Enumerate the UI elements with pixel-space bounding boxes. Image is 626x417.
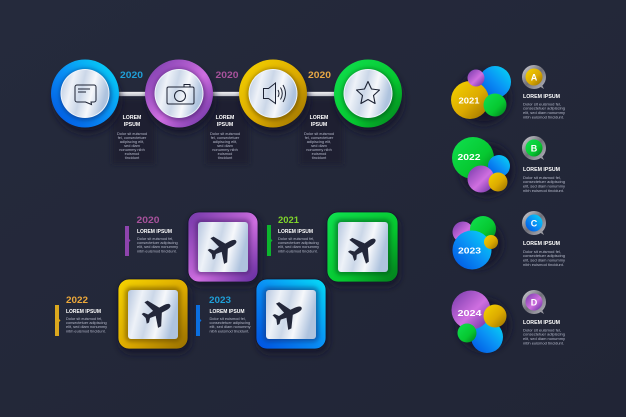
tile text 2022: 2022 — [66, 295, 88, 306]
tile text 2021: LOREM IPSUM — [278, 229, 313, 235]
bubble cluster 2022 — [452, 137, 513, 196]
bubble cluster 2022: 2022 — [458, 152, 481, 162]
square tile purple with plane — [188, 212, 260, 286]
badge A and text: elit, sed diam nonummy — [523, 110, 565, 115]
tile text 2022: elit, sed diam nonummy — [66, 324, 107, 329]
badge D and text: consectetuer adipiscing — [523, 332, 565, 336]
badge C and text: consectetuer adipiscing — [523, 253, 565, 258]
badge B and text — [522, 136, 565, 193]
tile text 2020: Dolor sit euismod fel, — [137, 236, 173, 241]
tile text 2022: nibh euismod tincidunt. — [66, 328, 106, 334]
label 2020 yellow: nonummy nibh — [306, 147, 332, 152]
label 2020 blue: euismod — [125, 151, 139, 156]
label 2020 purple: nonummy nibh — [212, 147, 238, 152]
timeline step 4: green circle, star — [334, 60, 403, 133]
square tile green with plane — [327, 212, 399, 286]
label 2020 yellow: LOREM — [310, 115, 328, 121]
badge D and text — [522, 290, 565, 346]
tile text 2023 — [196, 295, 251, 336]
label 2020 purple: sed diam — [217, 143, 233, 148]
badge C and text: Dolor sit euismod fel, — [523, 249, 561, 254]
label 2020 blue: nonummy nibh — [119, 147, 145, 152]
tile text 2020 — [125, 215, 178, 256]
badge B and text: Dolor sit euismod fel, — [523, 175, 561, 180]
badge B and text: LOREM IPSUM — [523, 167, 560, 173]
badge B and text: consectetuer adipiscing — [523, 179, 565, 184]
bubble cluster 2021 — [451, 66, 511, 124]
tile text 2020: 2020 — [136, 215, 160, 226]
label 2020 blue: fel, consectetuer — [118, 135, 147, 140]
label 2020 blue: 2020 — [120, 70, 143, 81]
label 2020 blue: adipiscing elit, — [120, 139, 144, 144]
badge D and text: elit, sed diam nonummy — [523, 336, 565, 341]
badge C and text — [522, 211, 565, 267]
badge A and text: consectetuer adipiscing — [523, 106, 565, 110]
square tile yellow with plane — [118, 279, 190, 353]
tile text 2021 — [267, 215, 319, 256]
tile text 2021: elit, sed diam nonummy — [278, 244, 319, 249]
label 2020 purple: 2020 — [216, 70, 238, 81]
tile text 2021: nibh euismod tincidunt. — [278, 248, 318, 254]
badge C and text: elit, sed diam nonummy — [523, 258, 565, 262]
bubble cluster 2023 — [452, 216, 502, 270]
tile text 2023: consectetuer adipiscing — [210, 320, 250, 325]
label 2020 blue: sed diam — [124, 143, 140, 148]
label 2020 yellow: sed diam — [311, 143, 327, 148]
label 2020 yellow: adipiscing elit, — [307, 139, 331, 144]
label 2020 purple: euismod — [218, 151, 232, 156]
label 2020 purple: adipiscing elit, — [213, 139, 237, 144]
badge C and text: nibh euismod tincidunt. — [523, 262, 564, 267]
label 2020 yellow: euismod — [312, 151, 326, 156]
timeline labels — [117, 70, 334, 160]
bubble cluster 2024 — [452, 290, 510, 353]
tile text 2022: LOREM IPSUM — [66, 309, 101, 315]
badge D and text: Dolor sit euismod fel, — [523, 328, 561, 332]
badge B and text: elit, sed diam nonummy — [523, 184, 565, 188]
tile text 2021: 2021 — [278, 215, 300, 226]
tile text 2021: Dolor sit euismod fel, — [278, 236, 314, 241]
badge A and text — [522, 65, 565, 120]
badge D and text: LOREM IPSUM — [523, 320, 560, 326]
tile text 2023: nibh euismod tincidunt. — [210, 328, 249, 334]
badge B and text: nibh euismod tincidunt. — [523, 188, 564, 193]
tile text 2022: consectetuer adipiscing — [66, 320, 107, 325]
badge C and text: LOREM IPSUM — [523, 241, 560, 247]
tile text 2020: nibh euismod tincidunt. — [137, 248, 177, 254]
badge A and text: A — [531, 72, 538, 82]
label 2020 purple: fel, consectetuer — [211, 135, 240, 140]
timeline: circles with icons — [51, 60, 403, 164]
label 2020 blue: Dolor sit euismod — [117, 131, 147, 136]
badge D and text: D — [531, 298, 538, 308]
label 2020 purple: LOREM — [216, 115, 234, 121]
label 2020 purple: IPSUM — [217, 122, 233, 128]
square tile blue with plane — [256, 279, 328, 353]
tile text 2023: Dolor sit euismod fel, — [210, 316, 246, 321]
tile text 2022: Dolor sit euismod fel, — [66, 316, 102, 321]
label 2020 purple — [210, 70, 240, 160]
tile text 2022 — [55, 295, 107, 336]
label 2020 purple: Dolor sit euismod — [210, 131, 240, 136]
badge A and text: Dolor sit euismod fel, — [523, 102, 561, 106]
bubble cluster 2021: 2021 — [458, 96, 480, 106]
badge D and text: nibh euismod tincidunt. — [523, 340, 564, 346]
badge A and text: nibh euismod tincidunt. — [523, 114, 564, 120]
badge B and text: B — [531, 144, 538, 154]
tile text 2021: consectetuer adipiscing — [278, 240, 319, 245]
label 2020 yellow: tincidunt — [312, 155, 327, 160]
tile text 2020: LOREM IPSUM — [137, 229, 172, 235]
timeline step 1: blue circle, speech bubble — [51, 60, 120, 133]
tile text 2023: elit, sed diam nonummy — [210, 324, 251, 329]
tile text 2023: 2023 — [209, 295, 231, 306]
text panels shadow — [112, 98, 343, 164]
label 2020 yellow: Dolor sit euismod — [304, 131, 334, 136]
bubble cluster 2023: 2023 — [458, 246, 481, 256]
label 2020 blue: IPSUM — [124, 122, 140, 128]
bubble cluster 2024: 2024 — [458, 308, 482, 318]
label 2020 purple: tincidunt — [218, 155, 233, 160]
tile text 2023: LOREM IPSUM — [210, 309, 244, 315]
badge C and text: C — [531, 218, 538, 228]
label 2020 yellow: 2020 — [308, 70, 331, 81]
label 2020 blue: LOREM — [123, 115, 141, 121]
timeline step 3: yellow circle, speaker — [239, 60, 308, 133]
connector line — [85, 92, 368, 96]
badge A and text: LOREM IPSUM — [523, 94, 560, 100]
tile text 2020: consectetuer adipiscing — [137, 240, 178, 245]
label 2020 yellow: IPSUM — [311, 122, 327, 128]
label 2020 blue: tincidunt — [125, 155, 140, 160]
tile text 2020: elit, sed diam nonummy — [137, 244, 178, 249]
label 2020 yellow: fel, consectetuer — [305, 135, 334, 140]
label 2020 blue — [117, 70, 147, 160]
timeline step 2: purple circle, camera — [145, 60, 214, 133]
label 2020 yellow — [304, 70, 334, 160]
